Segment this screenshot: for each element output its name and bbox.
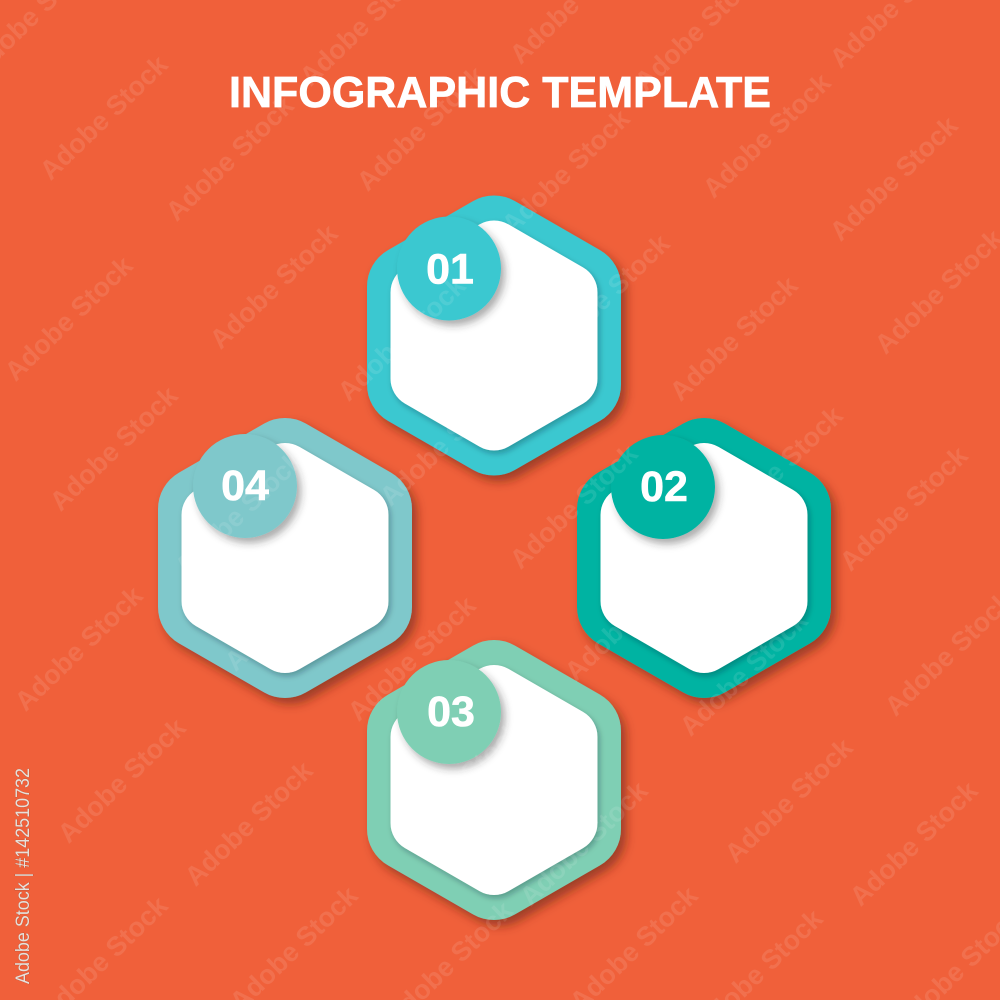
watermark pattern: Adobe Stock <box>219 540 359 677</box>
watermark pattern: Adobe Stock <box>169 445 309 582</box>
watermark pattern: Adobe Stock <box>844 775 984 912</box>
badge 03 <box>397 660 501 764</box>
hexagon 03 white panel <box>420 694 568 866</box>
hexagon 04 frame <box>200 460 370 656</box>
watermark pattern: Adobe Stock <box>52 712 192 849</box>
badge 02 <box>611 435 715 539</box>
badge 04 <box>193 434 297 538</box>
watermark pattern: Adobe Stock <box>504 438 644 575</box>
hexagon 04 white panel <box>210 472 360 644</box>
watermark pattern: Adobe Stock <box>824 110 964 247</box>
badge 01: 01 <box>426 246 474 294</box>
badge 04: 04 <box>221 462 269 510</box>
watermark pattern: Adobe Stock <box>697 67 837 204</box>
badge 03: 03 <box>427 688 475 736</box>
watermark pattern: Adobe Stock <box>496 103 636 240</box>
watermark pattern: Adobe Stock <box>719 732 859 869</box>
watermark pattern: Adobe Stock <box>332 270 472 407</box>
hexagon 01 white panel <box>420 250 568 422</box>
hexagon 02 white panel <box>630 472 778 644</box>
hexagon 04 <box>193 434 370 656</box>
watermark pattern: Adobe Stock <box>44 380 184 517</box>
watermark pattern: Adobe Stock <box>559 550 699 687</box>
hexagon 03 <box>397 660 579 878</box>
badge 02: 02 <box>640 463 688 511</box>
badge 01 <box>397 216 501 320</box>
watermark pattern: Adobe Stock <box>374 375 514 512</box>
watermark pattern: Adobe Stock <box>709 400 849 537</box>
hexagon 01 <box>397 216 579 434</box>
watermark pattern: Adobe Stock <box>834 440 974 577</box>
watermark pattern: Adobe Stock <box>389 715 529 852</box>
hexagon 01 frame <box>409 238 579 434</box>
watermark pattern: Adobe Stock <box>514 775 654 912</box>
hexagon 02 frame <box>619 460 789 656</box>
watermark pattern: Adobe Stock <box>179 755 319 892</box>
watermark pattern: Adobe Stock <box>342 590 482 727</box>
watermark pattern: Adobe Stock <box>674 605 814 742</box>
title: INFOGRAPHIC TEMPLATE <box>229 68 771 117</box>
watermark pattern: Adobe Stock <box>351 60 491 197</box>
hexagon 02 <box>611 435 789 656</box>
watermark pattern: Adobe Stock <box>204 218 344 355</box>
watermark pattern: Adobe Stock <box>160 90 300 227</box>
watermark pattern: Adobe Stock <box>34 49 174 186</box>
stock id vertical text: Adobe Stock | #142510732 <box>12 768 34 984</box>
watermark pattern: Adobe Stock <box>664 270 804 407</box>
watermark pattern: Adobe Stock <box>0 250 139 387</box>
hexagon 03 frame <box>409 682 579 878</box>
watermark pattern: Adobe Stock <box>536 228 676 365</box>
watermark pattern: Adobe Stock <box>9 580 149 717</box>
